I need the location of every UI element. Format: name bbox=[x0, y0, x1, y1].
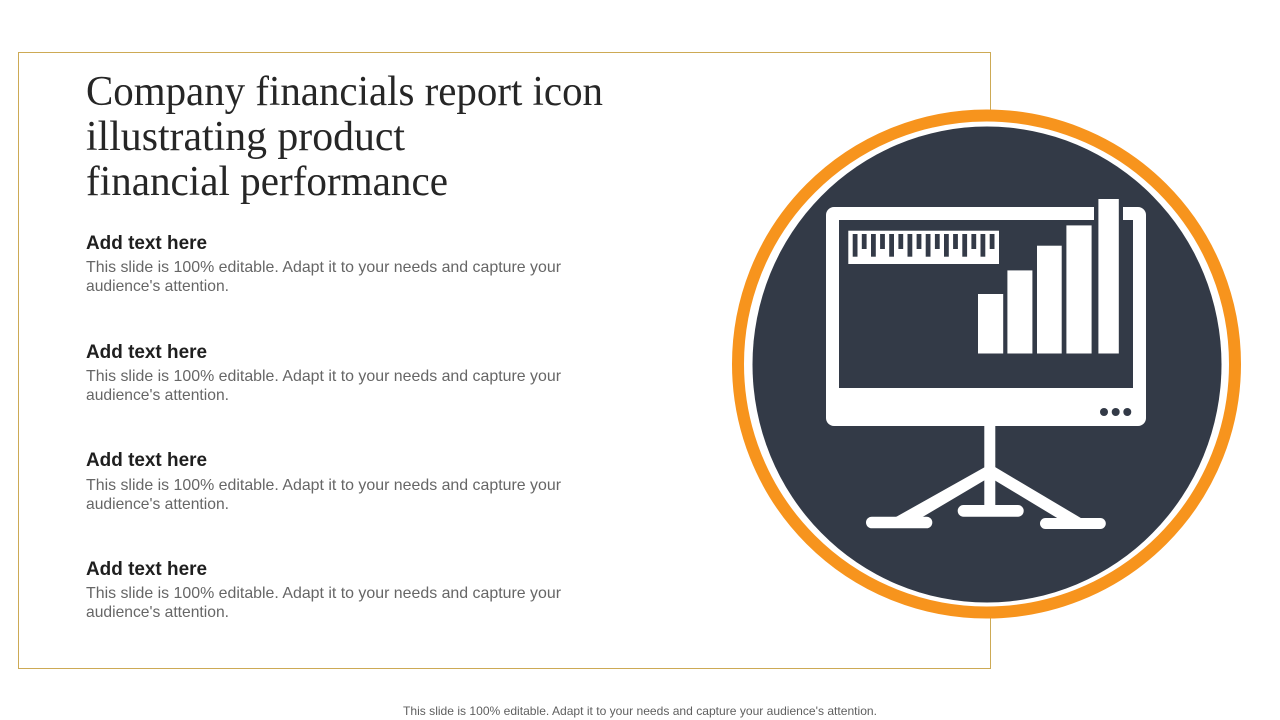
text block 3: Add text here bbox=[86, 449, 207, 471]
title: financial performance bbox=[86, 159, 448, 205]
text block 4 bbox=[86, 558, 562, 621]
title: illustrating product bbox=[86, 114, 405, 160]
screen frame bbox=[826, 207, 1146, 426]
title bbox=[86, 69, 603, 205]
tripod stand bbox=[866, 425, 1106, 529]
text block 2: audience's attention. bbox=[86, 387, 229, 404]
text block 3: audience's attention. bbox=[86, 496, 229, 513]
text block 4: Add text here bbox=[86, 558, 207, 580]
gold outline frame bbox=[18, 52, 990, 668]
text block 4: audience's attention. bbox=[86, 604, 229, 621]
text block 2: This slide is 100% editable. Adapt it to your needs and capture your bbox=[86, 368, 562, 385]
text block 1: This slide is 100% editable. Adapt it to your needs and capture your bbox=[86, 259, 562, 276]
circular badge bbox=[738, 116, 1235, 612]
text block 3: This slide is 100% editable. Adapt it to your needs and capture your bbox=[86, 477, 562, 494]
indicator dots bbox=[1100, 408, 1131, 416]
text block 3 bbox=[86, 449, 562, 513]
text block 2 bbox=[86, 341, 562, 404]
screen interior bbox=[839, 220, 1133, 388]
text block 2: Add text here bbox=[86, 341, 207, 363]
text block 1 bbox=[86, 232, 562, 295]
bar chart bbox=[978, 199, 1119, 354]
title: Company financials report icon bbox=[86, 69, 603, 115]
orange ring bbox=[738, 116, 1235, 612]
text block 1: audience's attention. bbox=[86, 278, 229, 295]
text block 1: Add text here bbox=[86, 232, 207, 254]
dark disc bbox=[752, 126, 1222, 602]
footer note: This slide is 100% editable. Adapt it to your needs and capture your audience's attention. bbox=[403, 704, 877, 718]
text block 4: This slide is 100% editable. Adapt it to your needs and capture your bbox=[86, 585, 562, 602]
barcode label bbox=[848, 231, 999, 264]
icon: presentation screen with bar chart bbox=[826, 199, 1146, 529]
